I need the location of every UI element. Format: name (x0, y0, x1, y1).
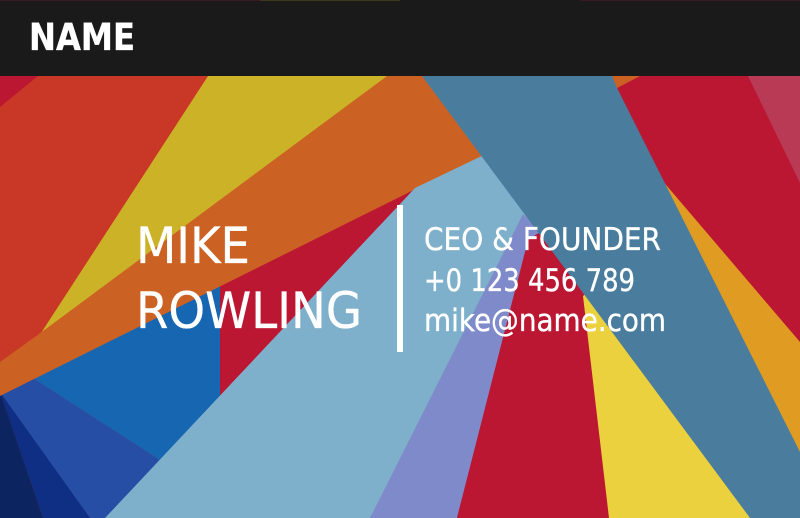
text block: contact details (424, 222, 666, 339)
heading: brand name: NAME (29, 16, 135, 59)
vertical divider (397, 205, 403, 352)
text block: contact details: mike@name.com (424, 303, 666, 339)
text block: person name: MIKE (136, 217, 250, 275)
header bar (0, 0, 800, 76)
text block: person name: ROWLING (136, 282, 362, 340)
text block: contact details: CEO & FOUNDER (424, 222, 661, 258)
text block: contact details: +0 123 456 789 (424, 263, 635, 299)
text block: person name (136, 217, 362, 340)
